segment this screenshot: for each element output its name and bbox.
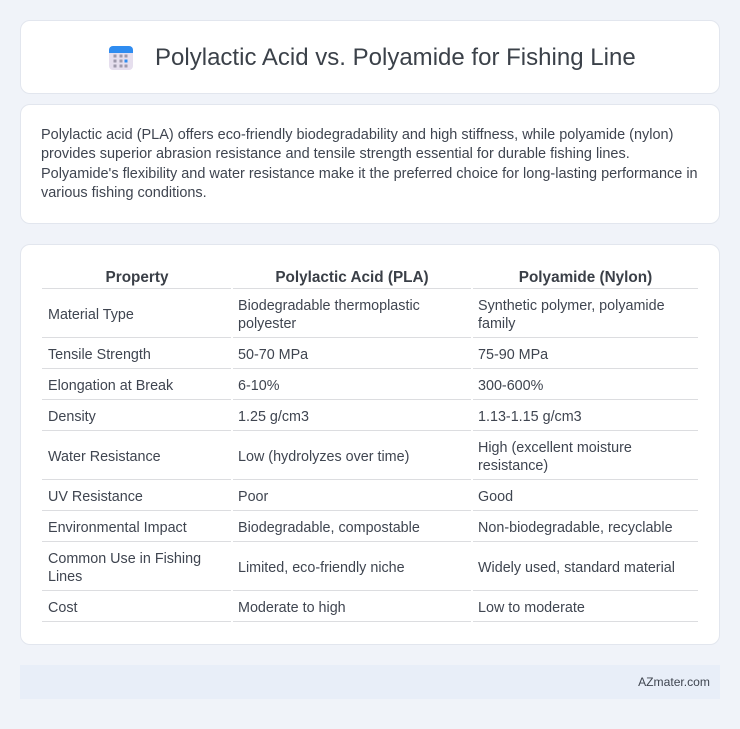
comparison table: Elongation at Break: [48, 378, 173, 394]
comparison table: Low to moderate: [478, 600, 585, 616]
comparison table: UV Resistance: [48, 489, 143, 505]
comparison table: Cost: [48, 600, 78, 616]
intro text: Polyamide's flexibility and water resistance make it the preferred choice for long-lasting performance in: [41, 166, 698, 182]
comparison table: Polyamide (Nylon): [519, 269, 652, 286]
comparison table: Biodegradable, compostable: [238, 520, 420, 536]
comparison table: High (excellent moisture: [478, 440, 632, 456]
comparison table: Synthetic polymer, polyamide: [478, 298, 665, 314]
comparison table: Material Type: [48, 307, 134, 323]
comparison table: 1.25 g/cm3: [238, 409, 309, 425]
intro card: [20, 104, 720, 224]
comparison table: Common Use in Fishing: [48, 551, 201, 567]
comparison table: Poor: [238, 489, 268, 505]
icon: calendar: [109, 46, 133, 70]
comparison table: Water Resistance: [48, 449, 161, 465]
comparison table: polyester: [238, 316, 296, 332]
comparison table: Polylactic Acid (PLA): [275, 269, 429, 286]
table card: [20, 244, 720, 645]
comparison table: 1.13-1.15 g/cm3: [478, 409, 582, 425]
comparison table: Non-biodegradable, recyclable: [478, 520, 673, 536]
footer credit: AZmater.com: [638, 675, 710, 689]
comparison table: Low (hydrolyzes over time): [238, 449, 409, 465]
comparison table: Moderate to high: [238, 600, 346, 616]
comparison table: 75-90 MPa: [478, 347, 548, 363]
intro text: various fishing conditions.: [41, 185, 207, 201]
comparison table: Limited, eco-friendly niche: [238, 560, 405, 576]
intro text: provides superior abrasion resistance and tensile strength essential for durable fishing lines.: [41, 146, 630, 162]
comparison table: Lines: [48, 569, 82, 585]
comparison table: 300-600%: [478, 378, 543, 394]
intro text: Polylactic acid (PLA) offers eco-friendly biodegradability and high stiffness, while polyamide (nylon): [41, 127, 673, 143]
comparison table: Biodegradable thermoplastic: [238, 298, 420, 314]
comparison table: 50-70 MPa: [238, 347, 308, 363]
comparison table: Environmental Impact: [48, 520, 187, 536]
comparison table: Property: [106, 269, 168, 286]
title card: [20, 20, 720, 94]
comparison table: 6-10%: [238, 378, 279, 394]
footer bar: [20, 665, 720, 699]
comparison table: family: [478, 316, 515, 332]
comparison table: resistance): [478, 458, 548, 474]
comparison table: [42, 269, 698, 622]
comparison table: Good: [478, 489, 513, 505]
title: Polylactic Acid vs. Polyamide for Fishing Line: [155, 44, 636, 71]
comparison table: Tensile Strength: [48, 347, 151, 363]
intro text: [41, 127, 698, 201]
comparison table: Widely used, standard material: [478, 560, 675, 576]
comparison table: Density: [48, 409, 96, 425]
